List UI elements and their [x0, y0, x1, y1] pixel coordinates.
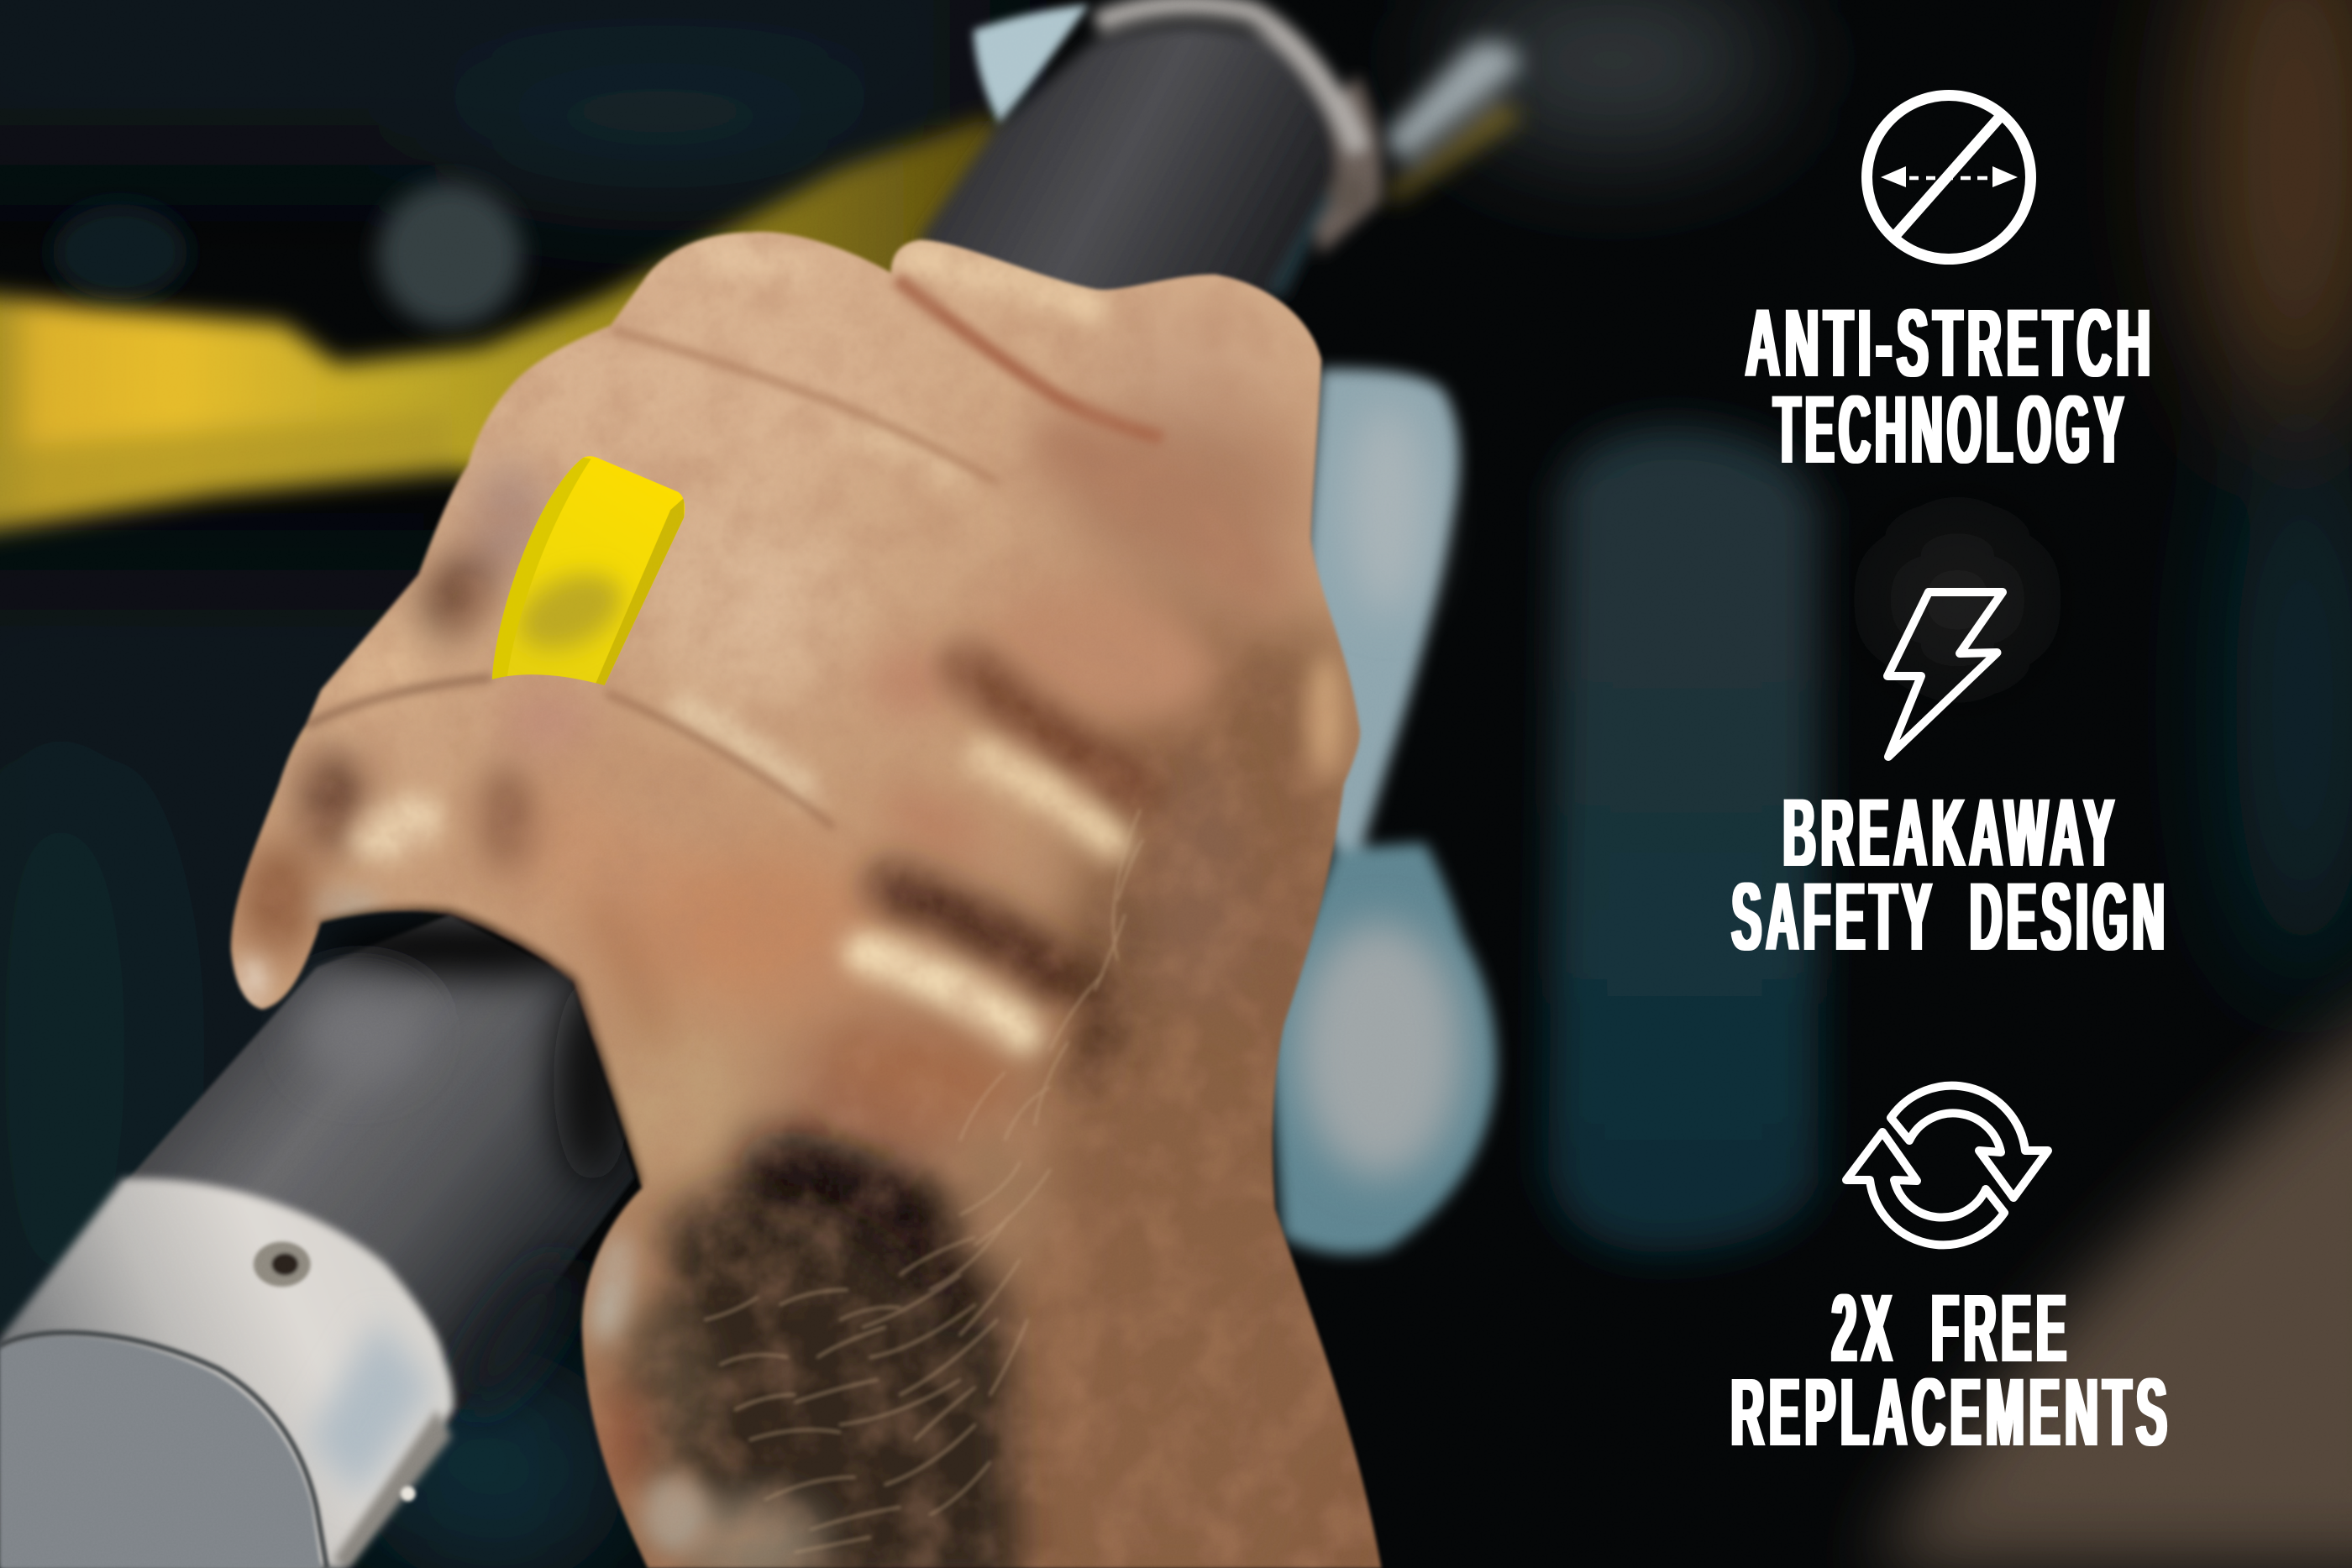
upper grip handle	[918, 4, 1382, 345]
feature: 2x free replacements	[1730, 1086, 2172, 1466]
icon: bokeh light circle	[52, 183, 522, 327]
icon: replacement arrows	[1846, 1086, 2048, 1245]
heading: 2x free replacements: 2X FREE	[1831, 1275, 2071, 1382]
icon: lightning bolt	[1887, 592, 2003, 757]
heading: breakaway safety design	[1732, 779, 2169, 971]
feature: anti-stretch technology	[1746, 96, 2155, 484]
skin mottling	[225, 225, 1395, 1568]
yellow resistance strap	[0, 117, 1050, 534]
hand	[225, 225, 1395, 1568]
wrist hair shadow	[668, 1155, 1020, 1568]
heading: anti-stretch technology	[1746, 290, 2155, 484]
yellow silicone ring	[480, 450, 690, 690]
icon: no-stretch circle	[1866, 96, 2031, 259]
dark valleys between knuckles	[968, 668, 1132, 787]
wrist hair	[705, 810, 1143, 1552]
knuckle highlights	[907, 258, 1095, 307]
silver collar and end cap	[0, 1178, 454, 1568]
skin pores	[225, 225, 1155, 1305]
feature: breakaway safety design	[1732, 592, 2169, 971]
knuckle shadows and skin tones	[1035, 435, 1275, 600]
pale shard upper left of grip	[974, 4, 1089, 126]
background pale shapes	[974, 4, 1524, 1254]
heading: 2x free replacements	[1730, 1275, 2172, 1466]
collar screw hole	[254, 1242, 311, 1287]
finger creases	[897, 279, 1163, 438]
lower grip handle	[123, 915, 634, 1428]
